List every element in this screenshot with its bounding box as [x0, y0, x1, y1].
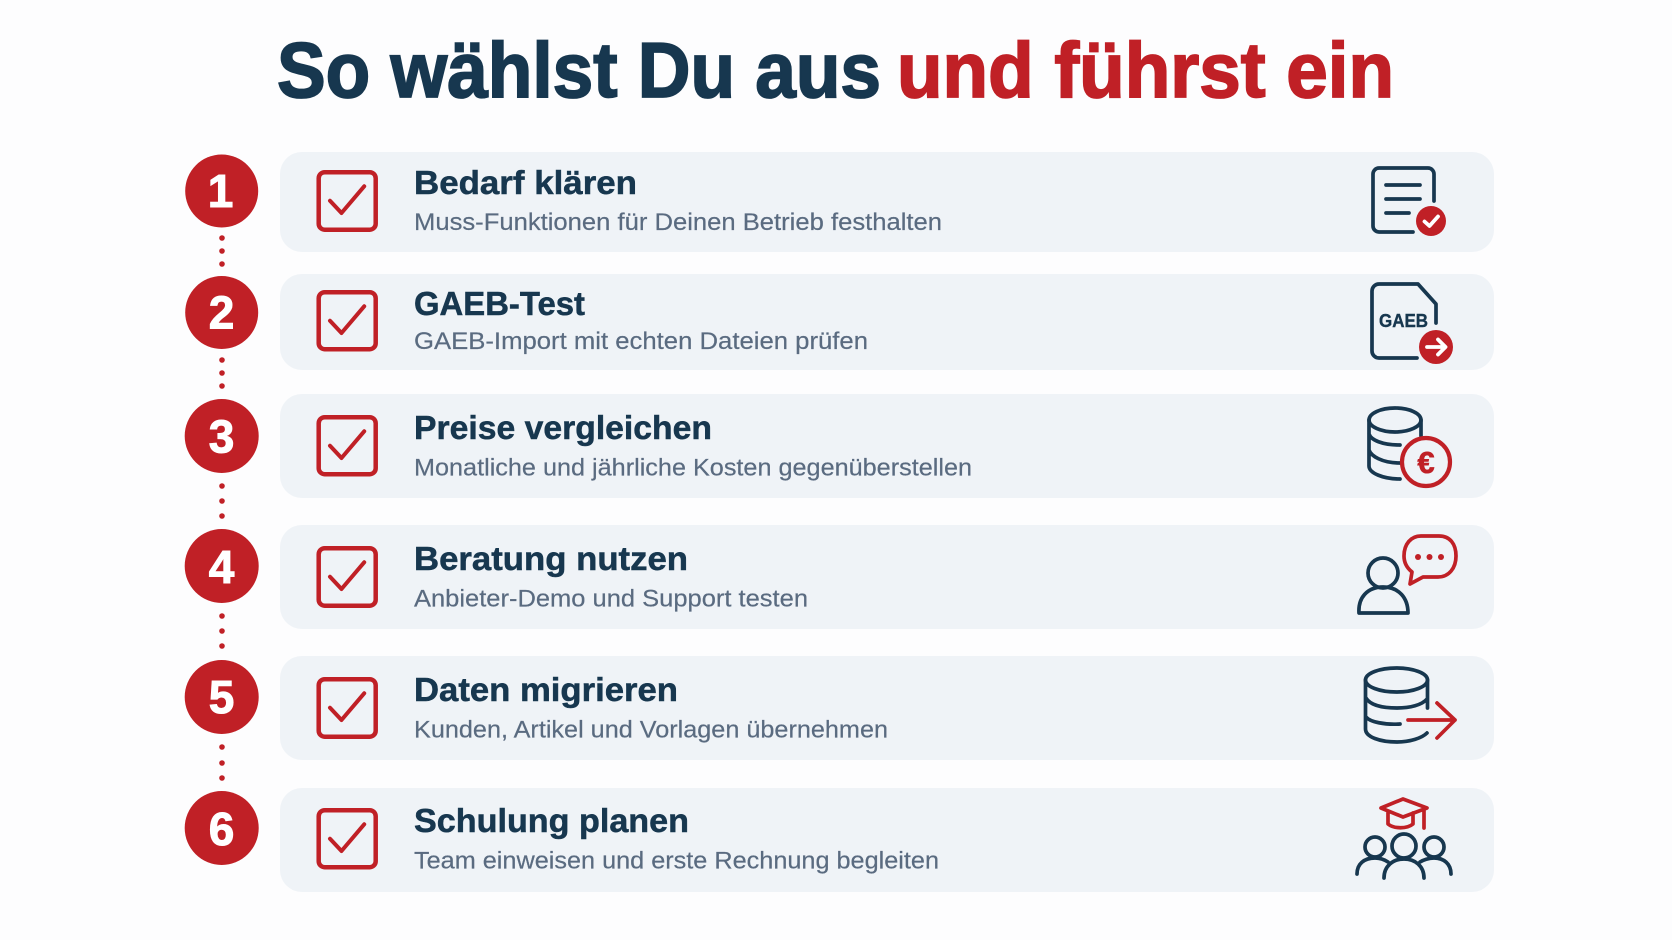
- description: Team einweisen und erste Rechnung begleiten: [414, 848, 939, 874]
- title: [277, 26, 1394, 114]
- icon: coins with euro: €: [1417, 445, 1435, 480]
- number badge 5: 5: [209, 671, 234, 723]
- description: GAEB-Import mit echten Dateien prüfen: [414, 328, 868, 355]
- number badge 3: 3: [209, 410, 234, 462]
- number badge 6: 6: [209, 803, 234, 855]
- icon: GAEB file with arrow: [1372, 284, 1453, 364]
- number badge 4: 4: [209, 541, 235, 593]
- heading: Preise vergleichen: [414, 409, 712, 446]
- heading: Beratung nutzen: [414, 540, 688, 577]
- number badge 1: [185, 154, 258, 228]
- title: So wählst Du aus: [277, 26, 881, 114]
- number badge 2: 2: [209, 286, 234, 338]
- checkbox: [319, 172, 376, 230]
- checkbox: [319, 548, 376, 606]
- icon: checked document: [1373, 168, 1446, 236]
- number badge 4: [185, 529, 259, 603]
- heading: GAEB-Test: [414, 285, 585, 322]
- number badge 3: [185, 399, 259, 473]
- checkbox: [319, 417, 376, 474]
- title: und führst ein: [897, 26, 1394, 114]
- number badge 6: [185, 791, 259, 865]
- description: Monatliche und jährliche Kosten gegenüberstellen: [414, 454, 972, 482]
- checkbox: [319, 810, 376, 867]
- description: Kunden, Artikel und Vorlagen übernehmen: [414, 716, 888, 744]
- description: Anbieter-Demo und Support testen: [414, 586, 808, 612]
- panel: step 4: [280, 525, 1494, 629]
- heading: Daten migrieren: [414, 671, 678, 708]
- icon: GAEB file with arrow: GAEB: [1379, 310, 1428, 331]
- panel: step 2: [280, 274, 1494, 370]
- description: Muss-Funktionen für Deinen Betrieb festhalten: [414, 209, 942, 236]
- icon: group with graduation cap: [1357, 799, 1451, 878]
- icon: person with speech bubble: [1359, 536, 1456, 613]
- icon: coins with euro: [1369, 408, 1450, 486]
- number badge 1: 1: [208, 165, 233, 217]
- checkbox: [319, 292, 376, 349]
- timeline connector dots: [219, 235, 225, 781]
- number badge 2: [185, 276, 258, 349]
- panel: step 1: [280, 152, 1494, 252]
- heading: Bedarf klären: [414, 164, 637, 201]
- panel: step 5: [280, 656, 1494, 760]
- panel: step 6: [280, 788, 1494, 892]
- icon: database with arrow: [1366, 668, 1455, 742]
- checkbox: [319, 679, 376, 737]
- heading: Schulung planen: [414, 802, 689, 839]
- number badge 5: [185, 660, 259, 734]
- panel: step 3: [280, 394, 1494, 498]
